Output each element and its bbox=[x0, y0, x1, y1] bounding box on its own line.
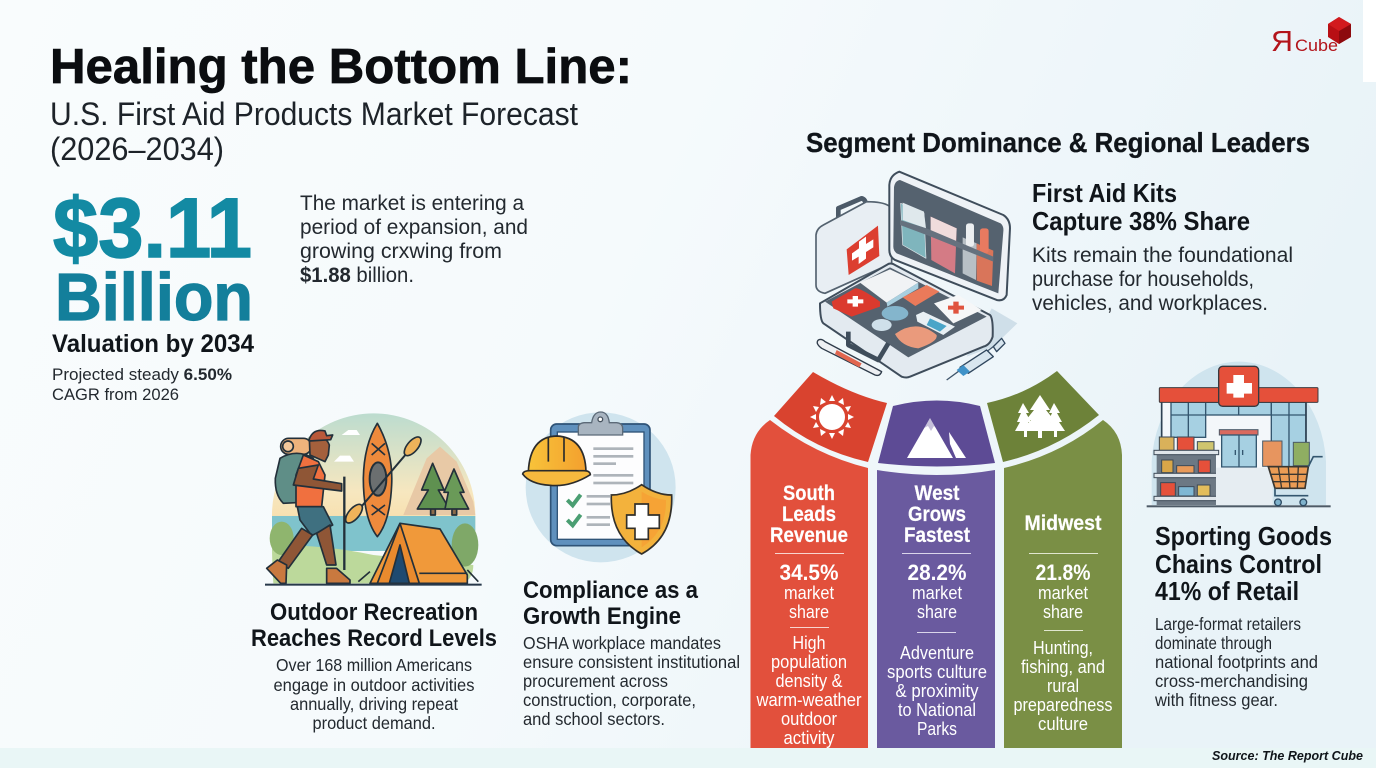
text: sporting goods body: national footprints and bbox=[1155, 652, 1318, 672]
text: compliance body: OSHA workplace mandates bbox=[523, 633, 721, 653]
logo: RCube: Cube bbox=[1295, 36, 1338, 55]
column: south leads revenue bbox=[750, 420, 868, 748]
panel: midwest bbox=[987, 371, 1122, 748]
text: outdoor recreation body: Over 168 million Americans bbox=[276, 655, 472, 675]
intro paragraph bbox=[300, 192, 528, 287]
column: west grows fastest: market bbox=[912, 583, 962, 603]
column: south leads revenue: share bbox=[789, 602, 829, 622]
icon: retail store bbox=[1147, 362, 1331, 507]
heading: outdoor recreation bbox=[251, 599, 497, 652]
column: west grows fastest: Grows bbox=[908, 503, 966, 526]
column: south leads revenue: activity bbox=[784, 728, 834, 748]
column: west grows fastest: & proximity bbox=[896, 681, 978, 701]
text: sporting goods body: Large-format retailers bbox=[1155, 614, 1301, 634]
heading: compliance: Compliance as a bbox=[523, 577, 699, 604]
column: south leads revenue: population bbox=[771, 652, 847, 672]
heading: compliance bbox=[523, 577, 699, 630]
heading: outdoor recreation: Outdoor Recreation bbox=[270, 599, 478, 626]
column: midwest: market bbox=[1038, 583, 1088, 603]
icon: trees wedge bbox=[987, 371, 1099, 462]
column: south leads revenue: South bbox=[783, 482, 835, 505]
heading: first aid kits bbox=[1032, 178, 1250, 236]
column: midwest: 21.8% bbox=[1036, 560, 1090, 585]
text: outdoor recreation body: annually, driving repeat bbox=[290, 694, 458, 714]
panel: west bbox=[877, 400, 995, 748]
column: south leads revenue: density & bbox=[776, 671, 842, 691]
source note: Source: The Report Cube bbox=[1212, 749, 1363, 763]
text: compliance body: procurement across bbox=[523, 671, 668, 691]
column: west grows fastest: share bbox=[917, 602, 957, 622]
column: midwest: Midwest bbox=[1024, 512, 1102, 535]
icon: compliance clipboard bbox=[523, 412, 676, 562]
key stat: $3.11 Billion: $3.11 bbox=[53, 181, 252, 275]
icon: sun wedge bbox=[774, 372, 887, 462]
column: west grows fastest: sports culture bbox=[887, 662, 987, 682]
key stat: $3.11 Billion bbox=[52, 181, 254, 404]
column: west grows fastest: Adventure bbox=[900, 643, 974, 663]
key stat: $3.11 Billion: Billion bbox=[55, 260, 253, 335]
column: midwest: rural bbox=[1047, 676, 1079, 696]
column: south leads revenue: High bbox=[792, 633, 826, 653]
text: compliance body: and school sectors. bbox=[523, 709, 665, 729]
subtitle: U.S. First Aid Products Market Forecast bbox=[50, 96, 578, 132]
heading: compliance: Growth Engine bbox=[523, 603, 681, 630]
column: west grows fastest: Fastest bbox=[904, 524, 970, 547]
column: midwest bbox=[1004, 420, 1122, 748]
intro paragraph: period of expansion, and bbox=[300, 216, 528, 239]
column: midwest: Hunting, bbox=[1033, 638, 1093, 658]
column: south leads revenue: market bbox=[784, 583, 834, 603]
text: first aid kits body: Kits remain the foundational bbox=[1032, 244, 1293, 267]
logo: RCube: Я bbox=[1271, 26, 1293, 58]
heading: sporting goods: Sporting Goods bbox=[1155, 521, 1332, 551]
icon: outdoor recreation bbox=[265, 413, 482, 586]
text: sporting goods body bbox=[1154, 614, 1318, 710]
column: south leads revenue: warm-weather bbox=[756, 690, 862, 710]
logo: RCube bbox=[1271, 17, 1351, 58]
heading: sporting goods: Chains Control bbox=[1155, 549, 1322, 579]
text: first aid kits body bbox=[1032, 244, 1293, 315]
key stat: $3.11 Billion: CAGR from 2026 bbox=[52, 385, 179, 404]
column: west grows fastest: Parks bbox=[917, 719, 957, 739]
text: outdoor recreation body: engage in outdoor activities bbox=[274, 675, 475, 695]
subtitle: (2026–2034) bbox=[50, 131, 224, 167]
text: sporting goods body: cross-merchandising bbox=[1155, 671, 1308, 691]
text: sporting goods body: dominate through bbox=[1155, 633, 1272, 653]
heading: sporting goods: 41% of Retail bbox=[1155, 576, 1299, 606]
column: west grows fastest: West bbox=[914, 482, 960, 505]
text: outdoor recreation body bbox=[274, 655, 475, 733]
heading: outdoor recreation: Reaches Record Levels bbox=[251, 625, 497, 652]
column: west grows fastest bbox=[877, 470, 995, 748]
icon: mountain wedge bbox=[878, 400, 995, 466]
column: west grows fastest: to National bbox=[898, 700, 976, 720]
panel: south bbox=[750, 372, 887, 748]
text: compliance body bbox=[523, 633, 740, 729]
heading: sporting goods bbox=[1155, 521, 1332, 606]
intro paragraph: growing crxwing from bbox=[300, 240, 502, 263]
key stat: $3.11 Billion: Valuation by 2034 bbox=[52, 330, 254, 358]
column: south leads revenue: outdoor bbox=[781, 709, 837, 729]
icon: first aid kit bbox=[816, 172, 1017, 380]
intro paragraph: The market is entering a bbox=[300, 192, 524, 215]
subtitle bbox=[50, 96, 578, 167]
column: south leads revenue: Revenue bbox=[770, 524, 848, 547]
heading: first aid kits: Capture 38% Share bbox=[1032, 206, 1250, 236]
column: midwest: culture bbox=[1038, 714, 1088, 734]
column: south leads revenue: 34.5% bbox=[780, 560, 838, 585]
column: midwest: share bbox=[1043, 602, 1083, 622]
text: outdoor recreation body: product demand. bbox=[312, 713, 436, 733]
title: Healing the Bottom Line: bbox=[50, 40, 632, 94]
key stat: $3.11 Billion: Projected steady 6.50% bbox=[52, 365, 232, 384]
text: first aid kits body: purchase for households, bbox=[1032, 268, 1254, 291]
column: midwest: preparedness bbox=[1014, 695, 1112, 715]
text: sporting goods body: with fitness gear. bbox=[1154, 690, 1278, 710]
column: south leads revenue: Leads bbox=[782, 503, 836, 526]
text: compliance body: construction, corporate, bbox=[523, 690, 696, 710]
heading: segment dominance: Segment Dominance & Regional Leaders bbox=[806, 127, 1310, 158]
intro paragraph: $1.88 billion. bbox=[300, 264, 414, 287]
heading: first aid kits: First Aid Kits bbox=[1032, 178, 1177, 208]
text: first aid kits body: vehicles, and workplaces. bbox=[1032, 292, 1268, 315]
column: midwest: fishing, and bbox=[1021, 657, 1105, 677]
column: west grows fastest: 28.2% bbox=[908, 560, 966, 585]
text: compliance body: ensure consistent institutional bbox=[523, 652, 740, 672]
